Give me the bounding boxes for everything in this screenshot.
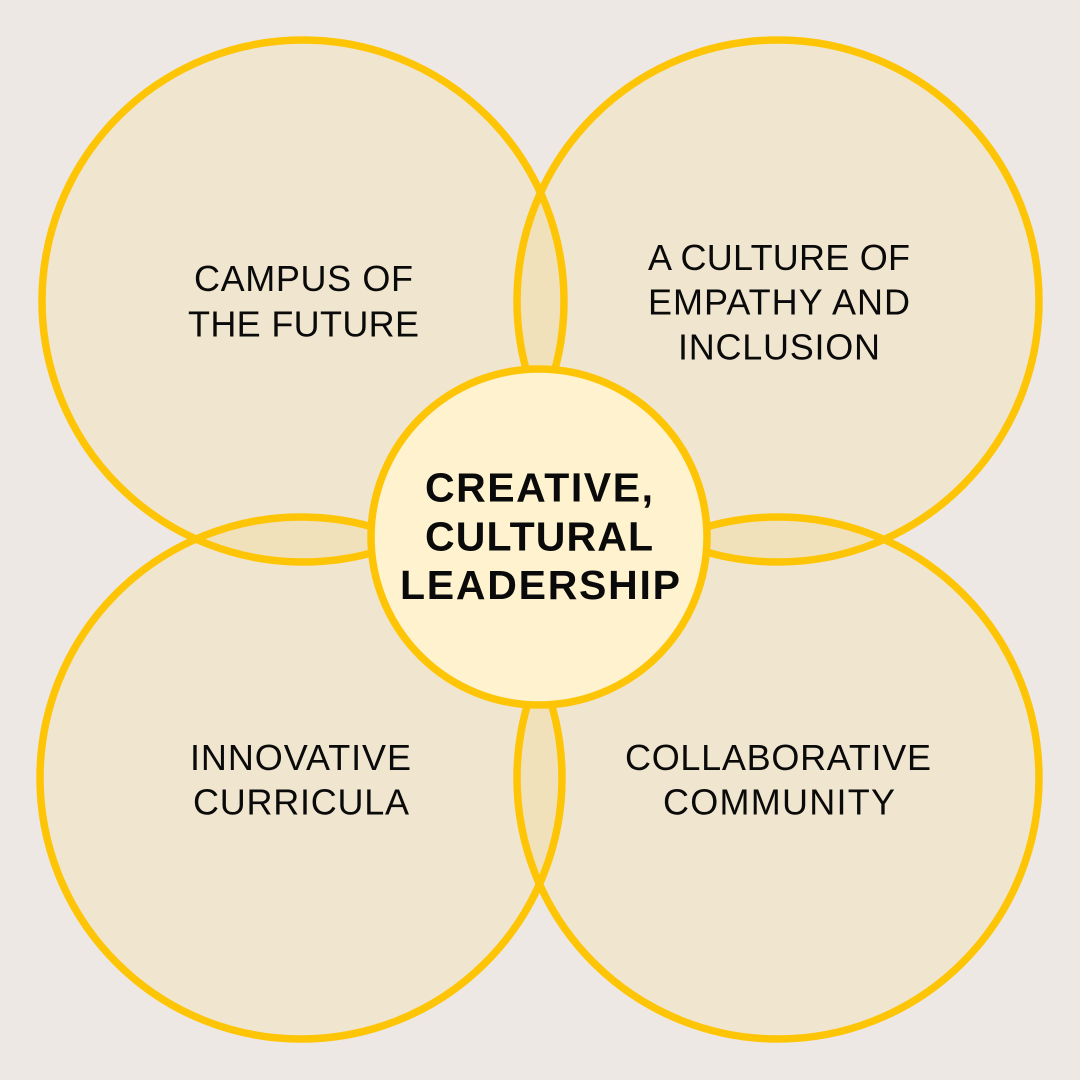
center label: CREATIVE,	[425, 464, 653, 510]
label: campus of the future: CAMPUS OF	[194, 258, 413, 299]
center label	[400, 464, 680, 608]
center label: LEADERSHIP	[400, 562, 680, 608]
label: innovative curricula	[190, 737, 411, 822]
label: a culture of empathy and inclusion	[648, 237, 910, 368]
center circle	[371, 369, 707, 705]
overlap: left	[206, 520, 368, 558]
label: innovative curricula: INNOVATIVE	[190, 737, 411, 778]
label: collaborative community: COMMUNITY	[663, 782, 895, 822]
circle: campus of the future	[42, 40, 564, 562]
label: collaborative community: COLLABORATIVE	[625, 737, 931, 778]
label: collaborative community	[625, 737, 931, 822]
overlap: right	[710, 520, 874, 558]
label: innovative curricula: CURRICULA	[193, 782, 409, 822]
overlap: top	[520, 202, 560, 366]
label: campus of the future: THE FUTURE	[188, 304, 419, 344]
circle: collaborative community	[517, 517, 1039, 1039]
label: a culture of empathy and inclusion: A CULTURE OF	[648, 237, 910, 278]
label: a culture of empathy and inclusion: INCLUSION	[678, 326, 880, 368]
label: campus of the future	[188, 258, 419, 344]
center label: CULTURAL	[425, 514, 653, 560]
circle: innovative curricula	[40, 517, 562, 1039]
overlap: bottom	[520, 708, 558, 874]
circle: culture of empathy	[517, 40, 1039, 562]
label: a culture of empathy and inclusion: EMPATHY AND	[648, 282, 910, 322]
